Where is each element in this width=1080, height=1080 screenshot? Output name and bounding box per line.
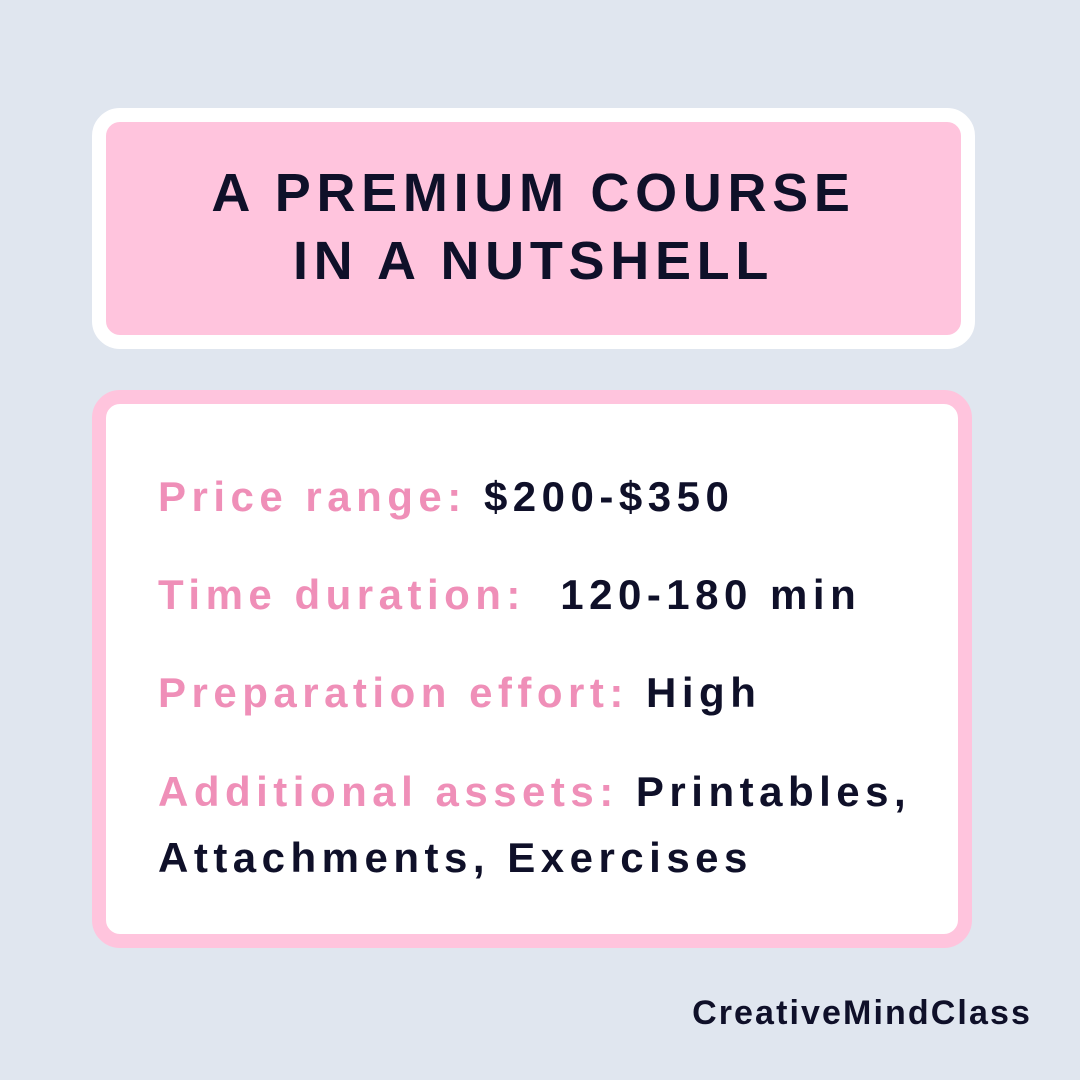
title: IN A NUTSHELL xyxy=(293,231,774,291)
title: A PREMIUM COURSE xyxy=(211,163,856,223)
panel: details xyxy=(92,390,972,948)
row: effort: Preparation effort: High xyxy=(158,669,761,716)
title box xyxy=(92,108,975,349)
row: time: Time duration: 120-180 min xyxy=(158,571,861,618)
row: assets xyxy=(158,768,911,881)
row: assets: Attachments, Exercises xyxy=(158,834,753,881)
title xyxy=(211,163,856,291)
row: price: Price range: $200-$350 xyxy=(158,473,734,520)
footer brand: CreativeMindClass xyxy=(692,994,1032,1032)
row: assets: Additional assets: Printables, xyxy=(158,768,911,815)
